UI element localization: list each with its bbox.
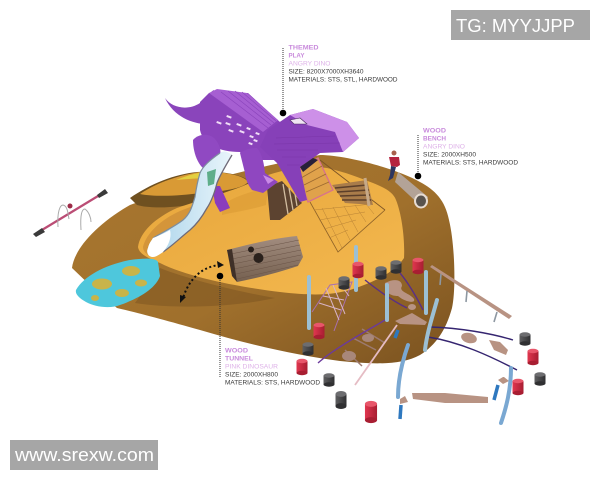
label: wood bench: ANGRY DINO bbox=[423, 144, 465, 150]
light blue poles bbox=[309, 247, 511, 423]
label: wood tunnel: PINK DINOSAUR bbox=[225, 364, 278, 370]
tan stepping platforms bbox=[385, 265, 512, 404]
purple rails bbox=[318, 273, 517, 370]
dino mouth bbox=[300, 158, 318, 172]
orange and pink mouth net bbox=[297, 158, 333, 202]
dino back leg bbox=[193, 135, 220, 172]
head stripes bbox=[274, 136, 340, 165]
purple dinosaur: themed play bbox=[165, 89, 359, 212]
label: wood tunnel bbox=[225, 348, 320, 386]
blue pool with spots bbox=[76, 259, 160, 307]
wood tunnel bbox=[227, 236, 303, 282]
label: wood bench bbox=[423, 128, 518, 166]
label: wood tunnel: MATERIALS: STS, HARDWOOD bbox=[225, 380, 320, 386]
brown ground base bbox=[72, 155, 454, 363]
dino head and neck bbox=[260, 109, 359, 202]
wood bench bbox=[395, 172, 428, 208]
label: themed play: THEMED bbox=[288, 44, 319, 52]
label: themed play bbox=[288, 44, 398, 84]
dino front foot highlight bbox=[263, 175, 274, 184]
pink climbing net bbox=[312, 282, 352, 331]
dino back foot bbox=[212, 186, 230, 212]
label: wood bench: WOOD bbox=[423, 128, 446, 134]
black cylinders bbox=[302, 260, 546, 409]
seesaw bbox=[33, 189, 108, 237]
label: themed play: MATERIALS: STS, STL, HARDWOOD bbox=[288, 76, 398, 84]
darker sand behind dino bbox=[222, 188, 268, 215]
dotted arrow bbox=[180, 261, 224, 303]
label: themed play: SIZE: 8200X7000XH3640 bbox=[288, 68, 364, 76]
slide bbox=[147, 152, 232, 257]
watermark: TG bbox=[451, 10, 590, 40]
dino snout highlight bbox=[290, 109, 359, 152]
dino front leg bbox=[240, 148, 278, 193]
play structures bbox=[309, 247, 517, 423]
darker sand lobe beside slide bbox=[143, 204, 197, 256]
pointer: themed play bbox=[280, 48, 286, 116]
watermark: website bbox=[10, 440, 158, 470]
label: wood tunnel: TUNNEL bbox=[225, 356, 253, 362]
wooden post under dino bbox=[267, 181, 302, 220]
pink rail bbox=[355, 325, 397, 385]
dino eye bbox=[290, 118, 307, 124]
dark blue posts bbox=[395, 330, 498, 419]
watermark: TG: TG: MYYJJPP bbox=[456, 15, 575, 36]
label: wood bench: BENCH bbox=[423, 136, 446, 142]
label: themed play: PLAY bbox=[288, 52, 305, 60]
spots bbox=[216, 115, 260, 145]
label: wood bench: SIZE: 2000XH500 bbox=[423, 152, 476, 158]
rope net bbox=[310, 160, 385, 252]
red cylinders bbox=[296, 258, 538, 423]
dino back ridge bbox=[209, 89, 278, 132]
wooden crawl frame bbox=[332, 178, 373, 206]
pointer: wood bench bbox=[415, 135, 421, 179]
orange sand area bbox=[138, 167, 404, 294]
back ridge stripes bbox=[221, 91, 276, 128]
label: wood tunnel: WOOD bbox=[225, 348, 248, 354]
pointer: wood tunnel bbox=[217, 273, 223, 377]
watermark: website: www.srexw.com bbox=[14, 444, 154, 465]
dino body bbox=[200, 93, 290, 160]
raised mound bbox=[130, 170, 251, 207]
beam legs bbox=[440, 274, 497, 322]
ladder steps bbox=[342, 329, 385, 366]
shadow on ground bbox=[135, 268, 275, 307]
label: wood bench: MATERIALS: STS, HARDWOOD bbox=[423, 160, 518, 166]
label: themed play: ANGRY DINO bbox=[288, 60, 330, 68]
human figure bbox=[388, 150, 400, 181]
dino tail bbox=[165, 90, 221, 124]
label: wood tunnel: SIZE: 2000XH800 bbox=[225, 372, 278, 378]
